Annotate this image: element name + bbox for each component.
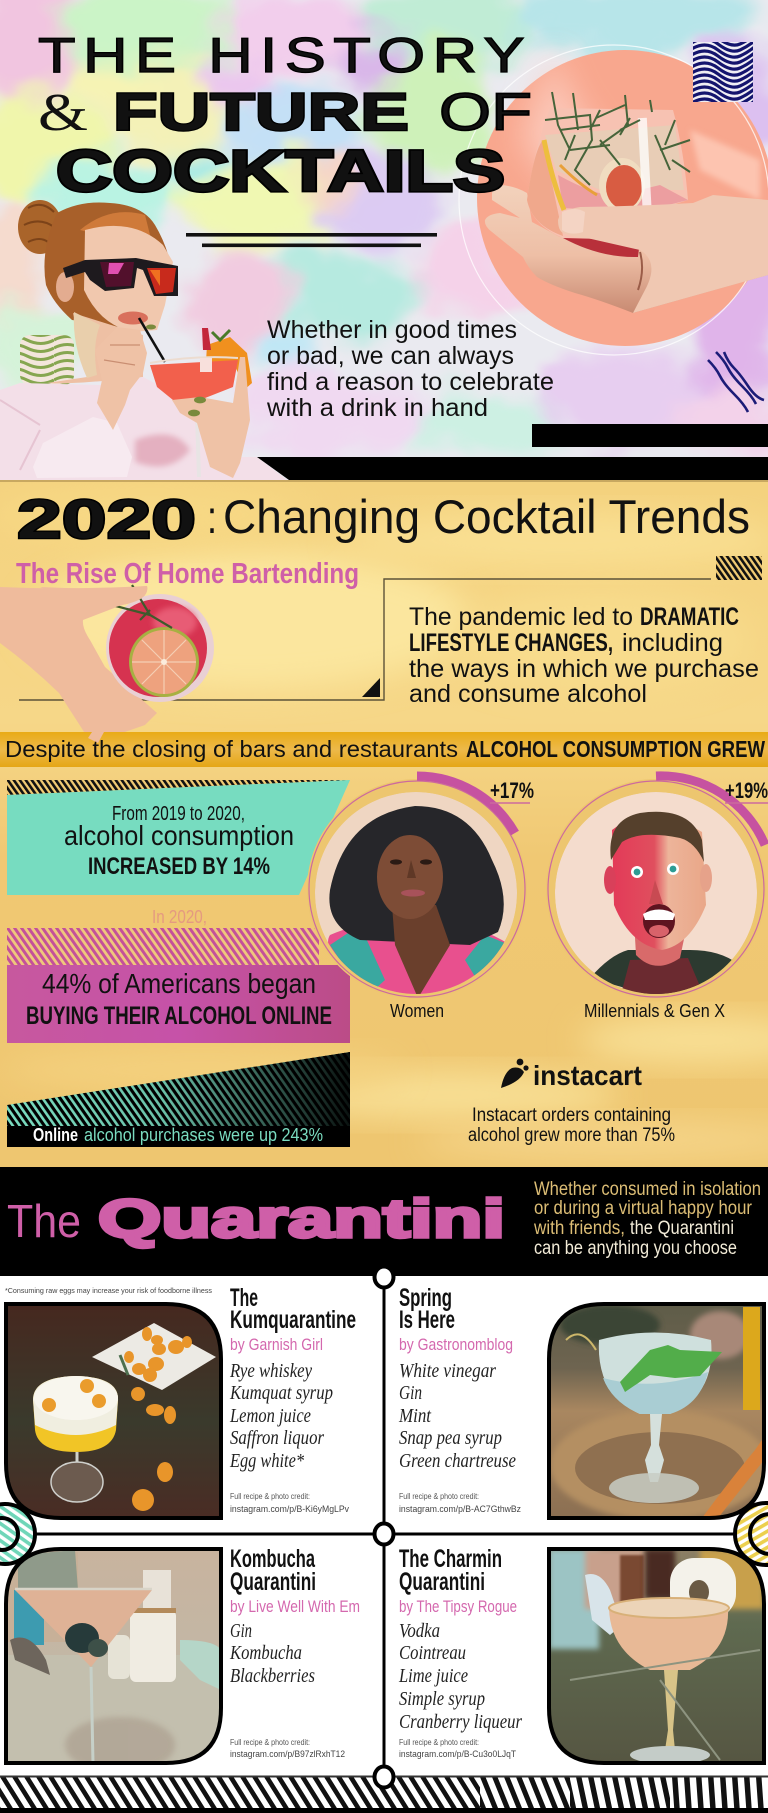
panel: magenta stat online buying xyxy=(7,928,350,1043)
footnote: *Consuming raw eggs may increase your risk of foodborne illness xyxy=(5,1286,212,1295)
text block: teal stat: From 2019 to 2020, xyxy=(112,803,245,825)
text block: magenta stat: BUYING THEIR ALCOHOL ONLINE xyxy=(26,1002,332,1030)
recipe: the charmin quarantini: instagram.com/p/B-Cu3o0LJqT xyxy=(399,1749,516,1760)
chart: man portrait with +19% arc xyxy=(546,776,768,999)
coral glass xyxy=(206,337,252,390)
decoration: double rule xyxy=(186,233,437,247)
recipe: the kumquarantine: Kumquat syrup xyxy=(229,1382,333,1404)
photo: kombucha quarantini xyxy=(6,1549,221,1773)
recipe: kombucha quarantini: Full recipe & photo credit: xyxy=(230,1738,310,1747)
recipe: spring is here: Snap pea syrup xyxy=(399,1427,502,1449)
recipe: the kumquarantine: The xyxy=(230,1284,258,1312)
decoration: navy squiggles xyxy=(708,352,764,412)
glass hand xyxy=(172,357,250,478)
recipe: kombucha quarantini: Gin xyxy=(230,1620,252,1642)
recipe: kombucha quarantini: Kombucha xyxy=(229,1642,302,1664)
banner: alcohol consumption grew: Despite the closing of bars and restaurants xyxy=(5,736,458,762)
decoration: footer stripes xyxy=(0,1766,768,1813)
heading: 2020 changing cocktail trends: 2020 xyxy=(17,488,196,550)
subheading: rise of home bartending: The Rise Of Home Bartending xyxy=(16,558,359,590)
icon: yellow ring right xyxy=(735,1503,768,1565)
recipe: the charmin quarantini: Simple syrup xyxy=(399,1688,485,1710)
recipe: the kumquarantine: instagram.com/p/B-Ki6yMgLPv xyxy=(230,1504,349,1515)
recipe: the kumquarantine: Rye whiskey xyxy=(229,1360,312,1382)
text block: the Quarantini xyxy=(630,1218,734,1239)
text block: teal stat: INCREASED BY 14% xyxy=(88,853,270,880)
text block: can be anything you choose xyxy=(534,1238,737,1259)
heading: The xyxy=(7,1195,81,1247)
recipe: kombucha quarantini xyxy=(229,1545,360,1760)
recipe: the charmin quarantini: Vodka xyxy=(399,1620,440,1642)
recipe: the kumquarantine: by Garnish Girl xyxy=(230,1335,323,1354)
text block: instacart growth: Instacart orders containing xyxy=(472,1105,671,1126)
text block: teal stat: alcohol consumption xyxy=(64,820,294,851)
text block: instacart growth: alcohol grew more than 75% xyxy=(468,1125,675,1146)
panel: recipe grid lines and nodes xyxy=(0,1266,768,1777)
recipe: the charmin quarantini xyxy=(398,1545,522,1760)
panel: online purchases stat xyxy=(7,1052,350,1147)
text block: intro xyxy=(266,316,554,422)
label: women: Women xyxy=(390,1001,444,1021)
icon: thumb and back of hand xyxy=(558,195,768,313)
recipe: the kumquarantine xyxy=(229,1284,356,1515)
heading: 2020 changing cocktail trends xyxy=(17,488,750,550)
panel: online purchases stat: alcohol purchases were up 243% xyxy=(84,1125,323,1145)
decoration: hatched square xyxy=(716,556,762,580)
text block: with friends, xyxy=(533,1218,625,1239)
title: OF xyxy=(439,83,532,142)
illustration: hand with red cocktail glass xyxy=(0,585,214,743)
recipe: spring is here: Spring xyxy=(399,1284,452,1312)
straw hand xyxy=(95,327,147,430)
decoration: green wave square xyxy=(20,335,74,385)
recipe: the charmin quarantini: Cointreau xyxy=(399,1642,466,1664)
icon: garnished cocktail glass xyxy=(527,92,690,257)
recipe: the kumquarantine: Kumquarantine xyxy=(230,1306,356,1334)
logo: instacart: instacart xyxy=(533,1060,642,1091)
recipe: the kumquarantine: Egg white* xyxy=(229,1450,304,1472)
photo: spring is here xyxy=(549,1304,768,1520)
title: THE HISTORY xyxy=(38,29,532,83)
recipe: the charmin quarantini: Quarantini xyxy=(399,1568,485,1596)
text block: pandemic lifestyle changes: The pandemic led to xyxy=(409,603,633,631)
text block: intro: find a reason to celebrate xyxy=(267,368,554,396)
text block xyxy=(533,1179,761,1259)
recipe: the charmin quarantini: Lime juice xyxy=(398,1665,468,1687)
chart: woman portrait with +17% arc: +17% xyxy=(490,778,534,803)
text block: intro: Whether in good times xyxy=(267,316,517,344)
recipe: spring is here: White vinegar xyxy=(399,1360,496,1382)
text block: magenta stat xyxy=(26,968,332,1030)
illustration: woman drinking cocktail xyxy=(0,200,287,480)
recipe: spring is here: Is Here xyxy=(399,1306,455,1334)
text block: intro: with a drink in hand xyxy=(266,394,488,422)
recipe: the kumquarantine: Saffron liquor xyxy=(230,1427,324,1449)
text block: intro: or bad, we can always xyxy=(267,342,514,370)
heading: 2020 changing cocktail trends: : xyxy=(207,491,217,543)
title: COCKTAILS xyxy=(56,139,505,204)
panel: teal stat consumption increase xyxy=(7,780,350,895)
recipe: spring is here: Full recipe & photo credit: xyxy=(399,1492,479,1501)
recipe: spring is here: Gin xyxy=(399,1382,422,1404)
icon: teal ring left xyxy=(0,1504,35,1564)
heading: 2020 changing cocktail trends: Changing Cocktail Trends xyxy=(223,490,750,543)
text block: pandemic lifestyle changes: DRAMATIC xyxy=(640,603,739,631)
text block: pandemic lifestyle changes: the ways in which we purchase xyxy=(409,655,759,683)
panel: the quarantini header xyxy=(0,1167,768,1276)
text block: instacart growth xyxy=(468,1105,675,1146)
decoration: navy wave square xyxy=(693,42,753,102)
panel: gold background xyxy=(0,480,768,1167)
panel: salmon circle with hand and cocktail xyxy=(459,45,768,355)
recipe: kombucha quarantini: Blackberries xyxy=(230,1665,315,1687)
heading xyxy=(7,1189,505,1249)
decoration: black bars xyxy=(257,424,768,480)
text block: magenta stat: 44% of Americans began xyxy=(42,968,316,999)
sleeve xyxy=(33,417,132,478)
panel: iridescent hero background xyxy=(0,0,768,480)
recipe: spring is here: Mint xyxy=(398,1405,431,1427)
recipe: spring is here: Green chartreuse xyxy=(399,1450,516,1472)
sweater xyxy=(0,377,287,480)
panel: online purchases stat: Online xyxy=(33,1125,78,1145)
photo: kumquarantine xyxy=(6,1304,221,1518)
label: in 2020: In 2020, xyxy=(152,907,207,927)
recipe: kombucha quarantini: instagram.com/p/B97zlRxhT12 xyxy=(230,1749,345,1760)
title: & xyxy=(38,84,88,142)
recipe: the charmin quarantini: by The Tipsy Rogue xyxy=(399,1597,517,1616)
title xyxy=(38,29,532,204)
heading: Quarantini xyxy=(98,1189,505,1249)
recipe: spring is here: by Gastronomblog xyxy=(399,1335,513,1354)
icon: fingers and palm under the glass xyxy=(485,185,768,313)
chart: woman portrait with +17% arc xyxy=(307,776,534,999)
text block: teal stat xyxy=(64,803,294,880)
recipe: kombucha quarantini: by Live Well With Em xyxy=(230,1597,360,1616)
recipe: kombucha quarantini: Kombucha xyxy=(230,1545,316,1573)
banner: alcohol consumption grew xyxy=(0,732,768,767)
recipe: the kumquarantine: Full recipe & photo credit: xyxy=(230,1492,310,1501)
text block: pandemic lifestyle changes: LIFESTYLE CHANGES, xyxy=(409,629,613,657)
recipe: the charmin quarantini: Cranberry liqueur xyxy=(399,1711,522,1733)
title: FUTURE xyxy=(113,83,409,142)
recipe: kombucha quarantini: Quarantini xyxy=(230,1568,316,1596)
text block: pandemic lifestyle changes: and consume alcohol xyxy=(409,680,647,708)
photo: the charmin quarantini xyxy=(549,1549,764,1764)
recipe: the charmin quarantini: The Charmin xyxy=(399,1545,502,1573)
neck and long strand xyxy=(47,313,143,383)
recipe: spring is here xyxy=(398,1284,521,1515)
text block: pandemic lifestyle changes xyxy=(409,603,759,708)
recipe: spring is here: instagram.com/p/B-AC7GthwBz xyxy=(399,1504,521,1515)
recipe: the kumquarantine: Lemon juice xyxy=(229,1405,311,1427)
callout frame xyxy=(19,579,711,700)
label: millennials and gen x: Millennials & Gen X xyxy=(584,1001,725,1021)
recipe: the charmin quarantini: Full recipe & photo credit: xyxy=(399,1738,479,1747)
text block: pandemic lifestyle changes: including xyxy=(622,629,723,657)
